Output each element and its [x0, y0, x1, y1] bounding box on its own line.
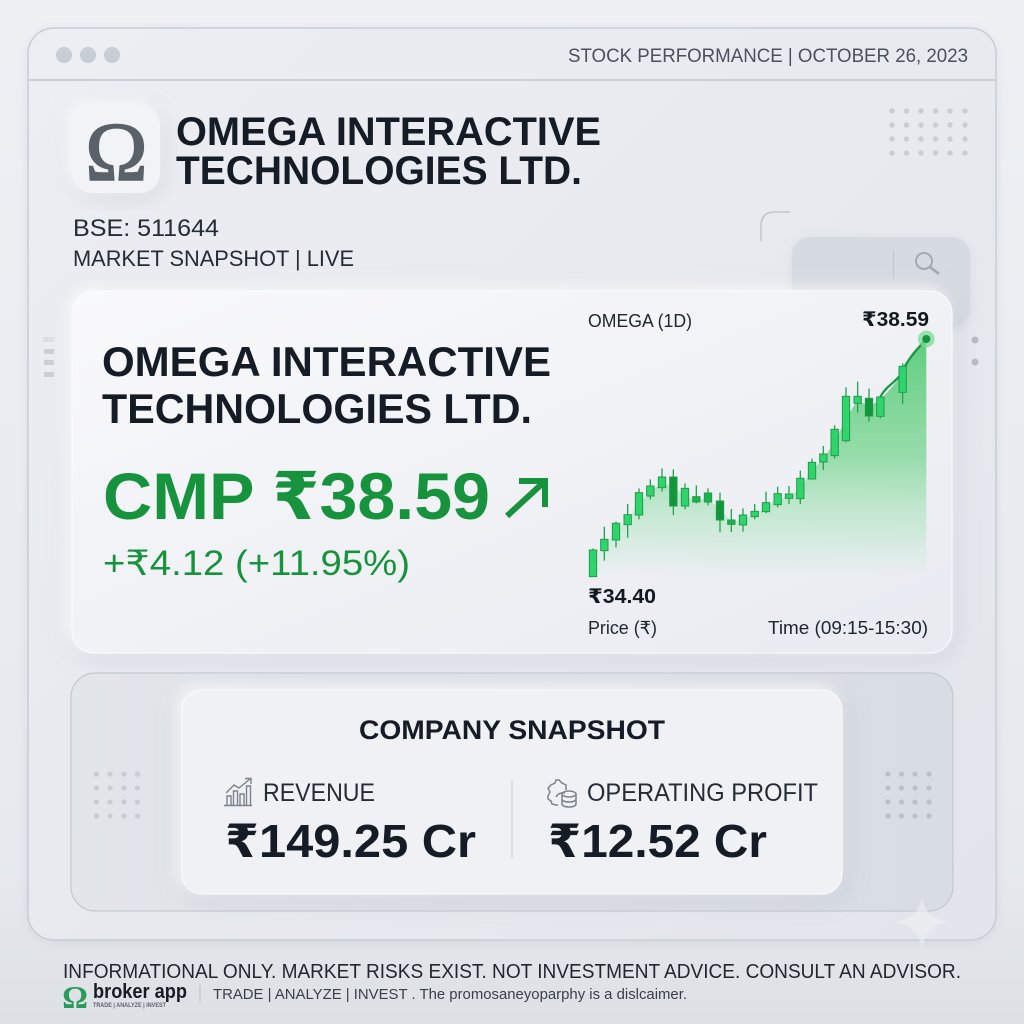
- heading: company snapshot: COMPANY SNAPSHOT: [359, 715, 666, 745]
- footer: broker app logo: [62, 979, 187, 1015]
- decoration: sparkle: [897, 898, 947, 948]
- footer: tagline: TRADE | ANALYZE | INVEST . The promosaneyoparphy is a dislcaimer.: [213, 986, 687, 1003]
- card heading: company name: [102, 338, 551, 432]
- text: exchange code and snapshot label: MARKET SNAPSHOT | LIVE: [73, 246, 354, 271]
- chart labels: Price (₹): [588, 618, 657, 638]
- chart labels: ₹38.59: [862, 309, 929, 331]
- footer: broker app logo: Ω: [62, 979, 88, 1015]
- footer: broker app logo: TRADE | ANALYZE | INVEST: [93, 1003, 166, 1009]
- decoration: dot grid right: [885, 771, 932, 819]
- chart labels: [588, 309, 929, 638]
- chart labels: OMEGA (1D): [588, 311, 692, 331]
- text: exchange code and snapshot label: [73, 215, 354, 271]
- card heading: company name: OMEGA INTERACTIVE: [102, 338, 551, 385]
- title: company name: [176, 110, 601, 193]
- card heading: company name: TECHNOLOGIES LTD.: [102, 385, 532, 432]
- panel: main stock card: [72, 291, 952, 653]
- footer: disclaimer: INFORMATIONAL ONLY. MARKET RISKS EXIST. NOT INVESTMENT ADVICE. CONSULT AN ADVISOR.: [63, 961, 961, 983]
- value: revenue: ₹149.25 Cr: [225, 815, 476, 867]
- current market price: CMP ₹38.59: [103, 459, 490, 533]
- value: operating profit: ₹12.52 Cr: [548, 815, 767, 867]
- icon: revenue chart: [224, 778, 252, 806]
- icon: up arrow: [507, 481, 545, 516]
- title: company name: TECHNOLOGIES LTD.: [176, 149, 582, 193]
- decoration: dot grid left: [94, 771, 140, 819]
- chart: candlestick intraday price: [589, 331, 935, 577]
- label: operating profit: OPERATING PROFIT: [587, 779, 818, 807]
- decoration: right side dots: [972, 336, 978, 366]
- icon: window control dots: [56, 47, 120, 63]
- header: stock performance date: STOCK PERFORMANCE | OCTOBER 26, 2023: [568, 46, 968, 67]
- decoration: dot grid top right: [889, 108, 968, 156]
- panel: lower inset tray: [71, 673, 953, 911]
- decoration: corner bracket: [761, 212, 790, 241]
- price change: +₹4.12 (+11.95%): [103, 544, 410, 583]
- title: company name: OMEGA INTERACTIVE: [176, 110, 601, 154]
- panel: company snapshot card: [182, 690, 842, 894]
- footer: broker app logo: broker app: [93, 981, 187, 1003]
- icon: search box: [792, 237, 970, 327]
- decoration: left side handle: [43, 337, 54, 377]
- text: exchange code and snapshot label: BSE: 511644: [73, 215, 219, 242]
- icon: gear with database: [548, 780, 576, 807]
- chart labels: Time (09:15-15:30): [768, 618, 928, 638]
- label: revenue: REVENUE: [263, 779, 375, 807]
- chart end point: [918, 331, 935, 347]
- icon: omega logo tile: Ω: [85, 106, 148, 199]
- chart area fill: [593, 339, 926, 577]
- chart labels: ₹34.40: [588, 586, 656, 608]
- candle bodies: [589, 366, 906, 577]
- chart trend line: [880, 339, 926, 397]
- candle wicks: [593, 363, 903, 577]
